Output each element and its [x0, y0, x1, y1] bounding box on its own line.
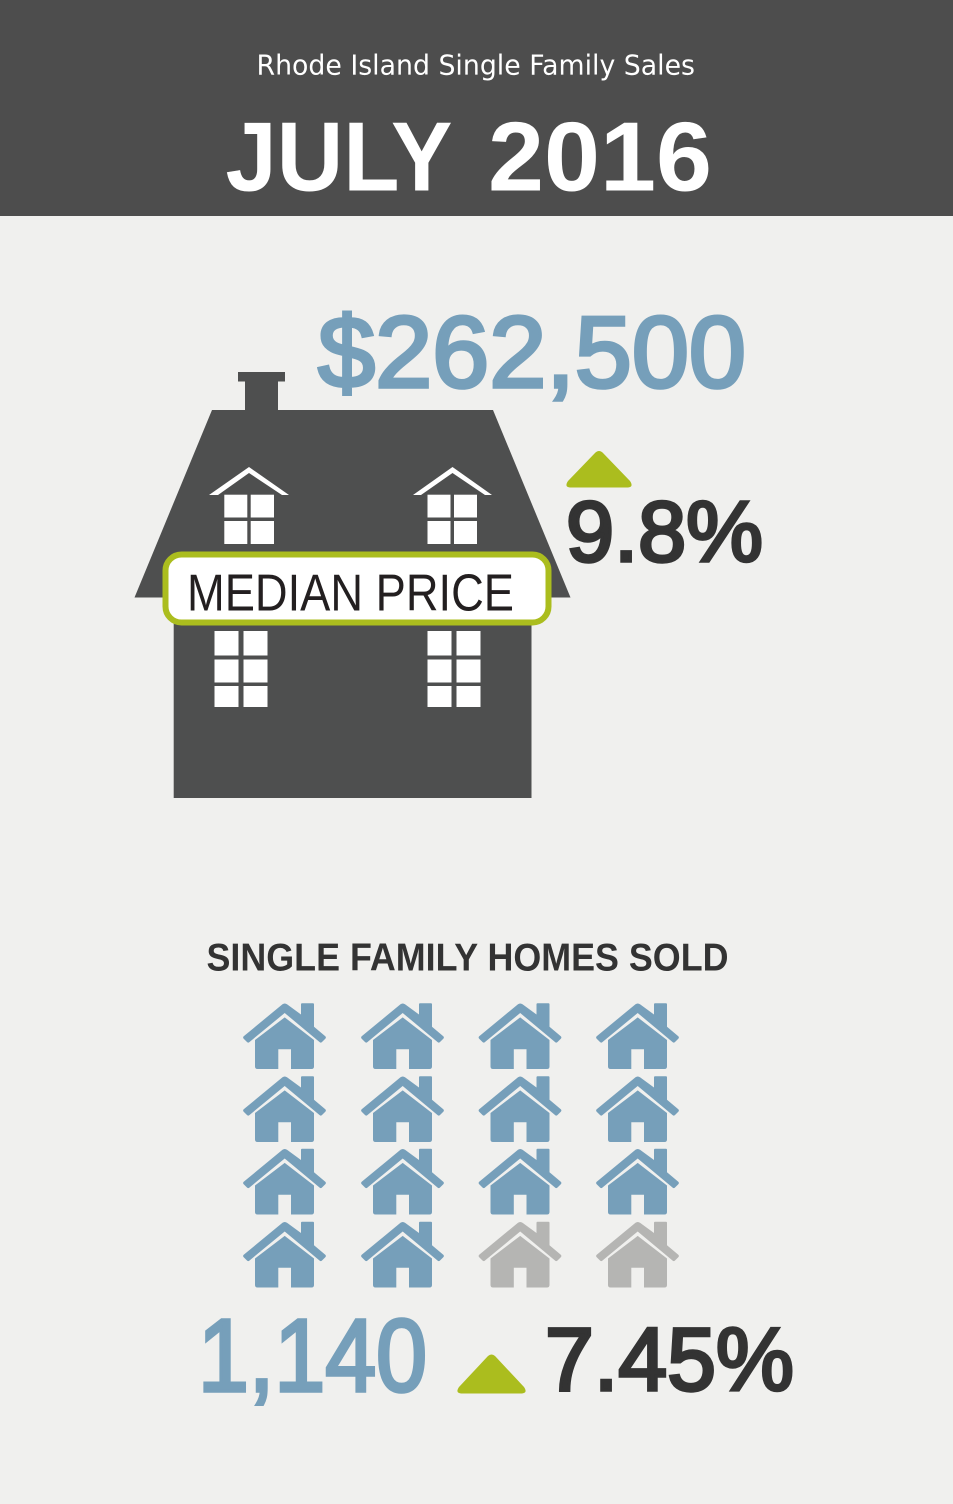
lower right window	[428, 631, 480, 707]
median price value: $262,500	[318, 297, 746, 409]
median price label: MEDIAN PRICE	[187, 564, 514, 622]
title: 2016	[488, 102, 712, 212]
up arrow: median price	[566, 451, 632, 488]
up arrow: homes sold	[457, 1354, 526, 1394]
icon grid: homes sold	[243, 1003, 679, 1288]
subtitle: Rhode Island Single Family Sales	[256, 48, 695, 82]
lower left window	[214, 631, 268, 707]
median price change: 9.8%	[566, 485, 763, 580]
homes sold change: 7.45%	[545, 1309, 794, 1409]
upper right window	[413, 467, 492, 544]
title: JULY	[226, 102, 452, 212]
upper left window	[209, 467, 289, 544]
homes sold value: 1,140	[198, 1298, 427, 1413]
header band	[0, 0, 953, 216]
icon: large house	[134, 372, 570, 798]
homes sold heading: SINGLE FAMILY HOMES SOLD	[206, 936, 728, 980]
